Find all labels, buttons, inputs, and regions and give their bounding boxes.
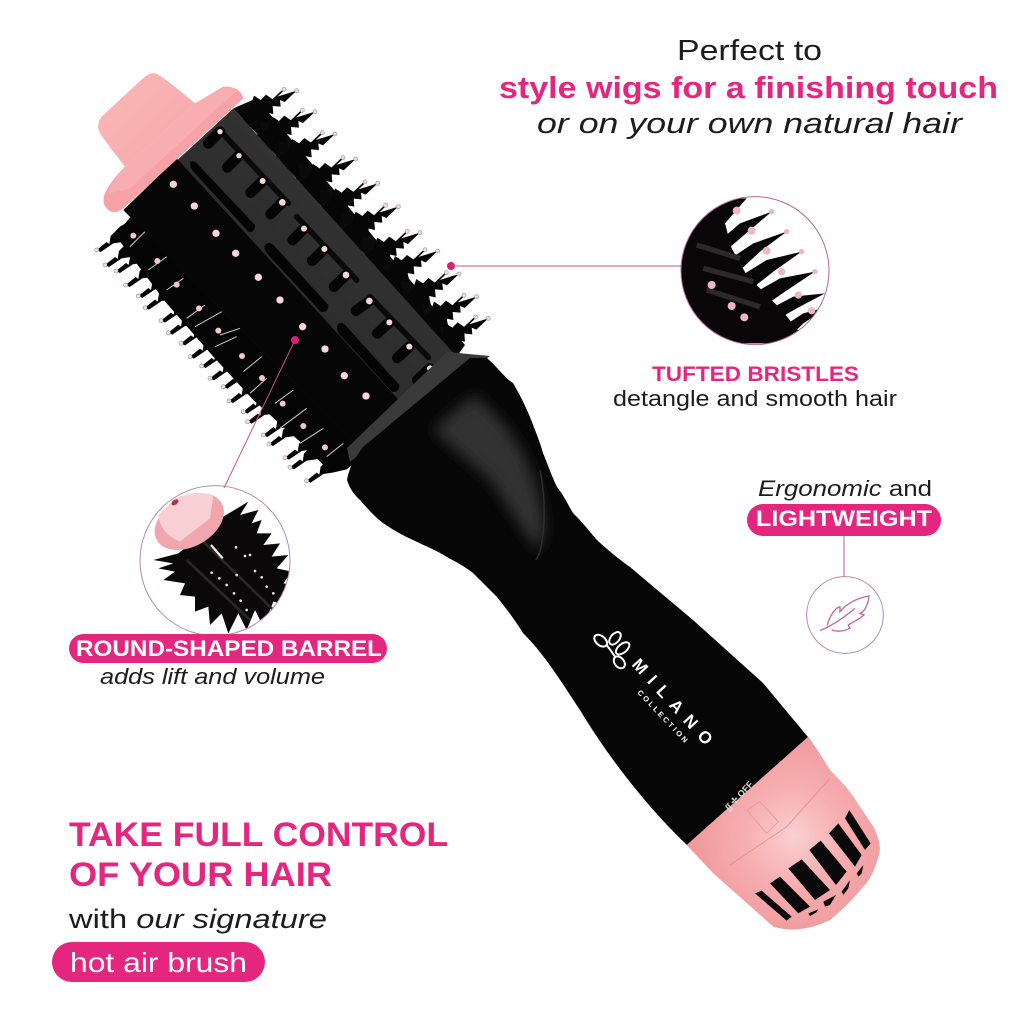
heading: perfect to style wigs: Perfect to	[677, 35, 822, 67]
brand logo: Milano Collection	[592, 630, 755, 813]
bottom headline: take full control	[68, 816, 448, 934]
barrel cylinder	[123, 108, 457, 447]
pink vent base	[687, 737, 880, 929]
product: hot air brush	[95, 73, 880, 929]
callout: round-shaped barrel	[69, 634, 387, 689]
handle sheen	[433, 395, 545, 552]
sub wordmark: COLLECTION	[636, 688, 690, 744]
icon: feather in circle	[807, 577, 883, 653]
callout line: bristles	[447, 262, 681, 270]
callout: ergonomic and lightweight: LIGHTWEIGHT	[756, 506, 933, 531]
vent slots	[755, 810, 871, 921]
circle: round barrel close-up	[140, 482, 293, 636]
callout line: barrel to round-shaped barrel circle	[224, 340, 295, 488]
brush barrel with bristles	[95, 73, 490, 483]
callout: round-shaped barrel: adds lift and volume	[100, 664, 325, 689]
pill: hot air brush	[52, 942, 265, 982]
handle	[347, 352, 808, 845]
pink cap detail	[154, 492, 224, 550]
heading: perfect to style wigs	[499, 35, 998, 140]
bottom headline: take full control: with our signature	[68, 904, 327, 934]
heading: perfect to style wigs: or on your own natural hair	[537, 108, 964, 140]
barrel pins	[170, 129, 433, 400]
callout: round-shaped barrel: ROUND-SHAPED BARREL	[76, 636, 382, 661]
callout: tufted bristles: detangle and smooth hair	[613, 386, 897, 411]
upper bristle tufts	[233, 87, 490, 372]
callout: ergonomic and lightweight	[747, 476, 941, 577]
switch labels: ∫∫ ✢ OFF	[722, 779, 755, 813]
callout: tufted bristles	[613, 362, 897, 411]
bottom headline: take full control: OF YOUR HAIR	[69, 856, 332, 894]
wordmark: MILANO	[628, 655, 716, 749]
callout: tufted bristles: TUFTED BRISTLES	[652, 362, 859, 386]
logo mark	[592, 630, 632, 670]
bottom headline: take full control: TAKE FULL CONTROL	[69, 816, 448, 854]
lower bristle tufts	[95, 207, 370, 483]
pill: hot air brush: hot air brush	[70, 947, 247, 978]
callout dot: barrel	[291, 336, 299, 344]
pink end cap	[98, 73, 243, 212]
circle: tufted bristles close-up	[680, 197, 829, 345]
callout: ergonomic and lightweight: Ergonomic and	[758, 476, 932, 501]
heading: perfect to style wigs: style wigs for a finishing touch	[499, 70, 998, 105]
